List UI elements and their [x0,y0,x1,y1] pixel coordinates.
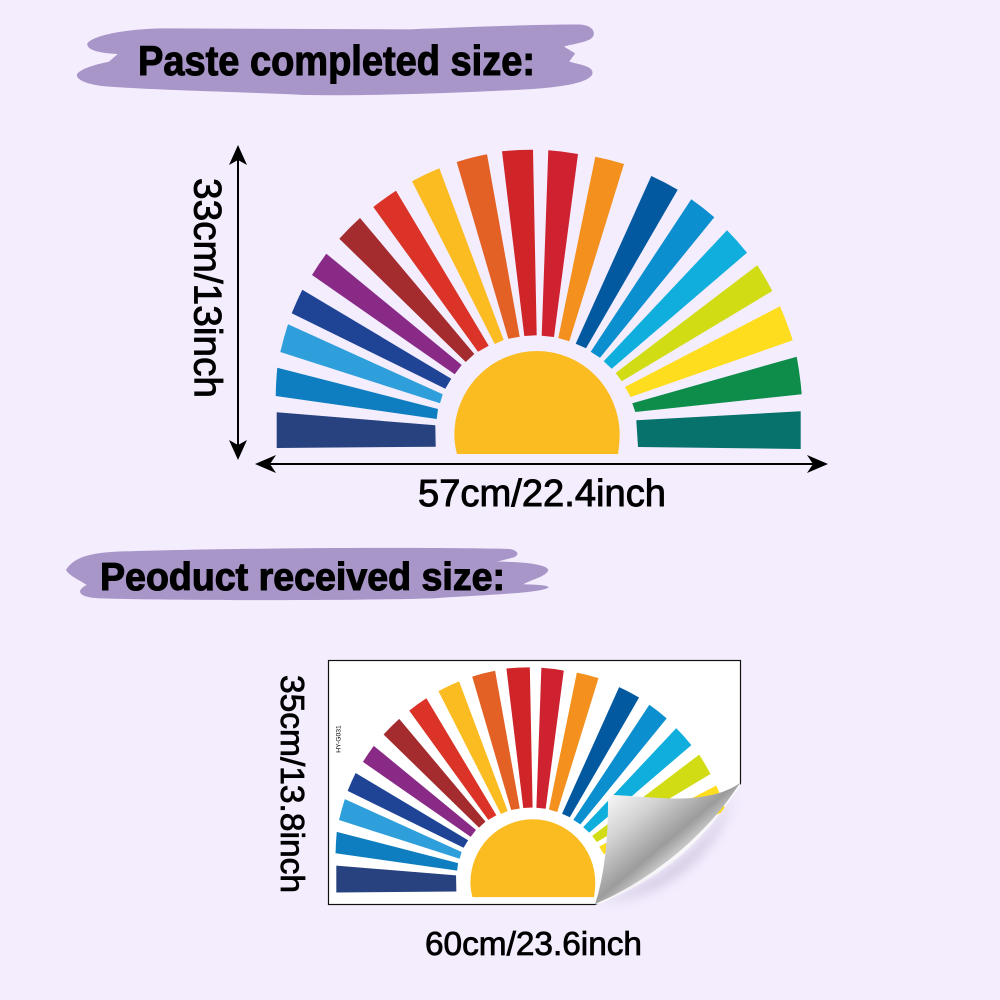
ray 12 orange [558,157,624,341]
sheet half sun [470,819,595,897]
ray 6 brown [339,218,474,362]
sheet ray 6 [384,719,485,828]
ray 1 navy [277,412,436,448]
sheet code: HY-G031 [336,725,342,753]
sheet ray 7 [409,698,496,820]
sheet ray 2 [336,832,458,871]
ray 9 orange [457,154,520,339]
sheet ray 11 [536,668,564,809]
sheet ray 5 [363,746,476,837]
half sun [454,351,620,454]
ray 16 lime [616,265,772,381]
cut corner of sheet [595,784,745,910]
heading text: bottom: Peoduct received size: [100,556,505,599]
label: height 33cm: 33cm/13inch [186,178,228,398]
curl shadow [600,792,735,902]
sheet ray 4 [348,773,468,848]
ray 8 yellow [412,168,504,344]
ray 4 navy [292,290,451,389]
arrow: height dimension [229,145,247,460]
sheet background [328,660,740,904]
ray 19 teal [636,411,801,449]
sheet ray 14 [573,705,667,824]
sheet ray 9 [472,671,520,810]
sheet ray 16 [592,755,710,842]
ray 13 dark blue [576,176,678,348]
label: width 60cm: 60cm/23.6inch [425,926,642,963]
sheet ray 3 [339,799,462,859]
sunburst: completed size [276,150,802,454]
ray 3 light blue [280,324,443,403]
sheet ray 10 [506,667,533,808]
brush banner: bottom [66,548,548,600]
heading: product received size [66,548,548,600]
ray 10 red [502,150,537,336]
sheet ray 8 [438,681,508,814]
arrow: width dimension [255,455,828,473]
ray 2 blue [276,368,438,419]
sheet ray 13 [562,687,639,817]
sheet ray 12 [549,673,599,812]
ray 7 red [373,191,489,352]
ray 15 cyan [604,230,747,369]
sunburst: sheet [336,667,726,897]
ray 14 blue [591,199,714,358]
sticker sheet [328,660,745,910]
brush banner: top [77,25,594,95]
label: width 57cm: 57cm/22.4inch [418,473,666,515]
page curl [595,783,740,904]
ray 11 red [542,150,578,337]
ray 18 green [632,357,802,412]
heading text: top: Paste completed size: [138,37,535,84]
label: height 35cm: 35cm/13.8inch [273,675,310,893]
ray 17 yellow [625,306,793,397]
heading: paste completed size [77,25,594,95]
sheet ray 17 [599,786,726,854]
sheet ray 15 [583,728,691,833]
sheet ray 1 [336,866,456,893]
ray 5 purple [312,254,462,374]
